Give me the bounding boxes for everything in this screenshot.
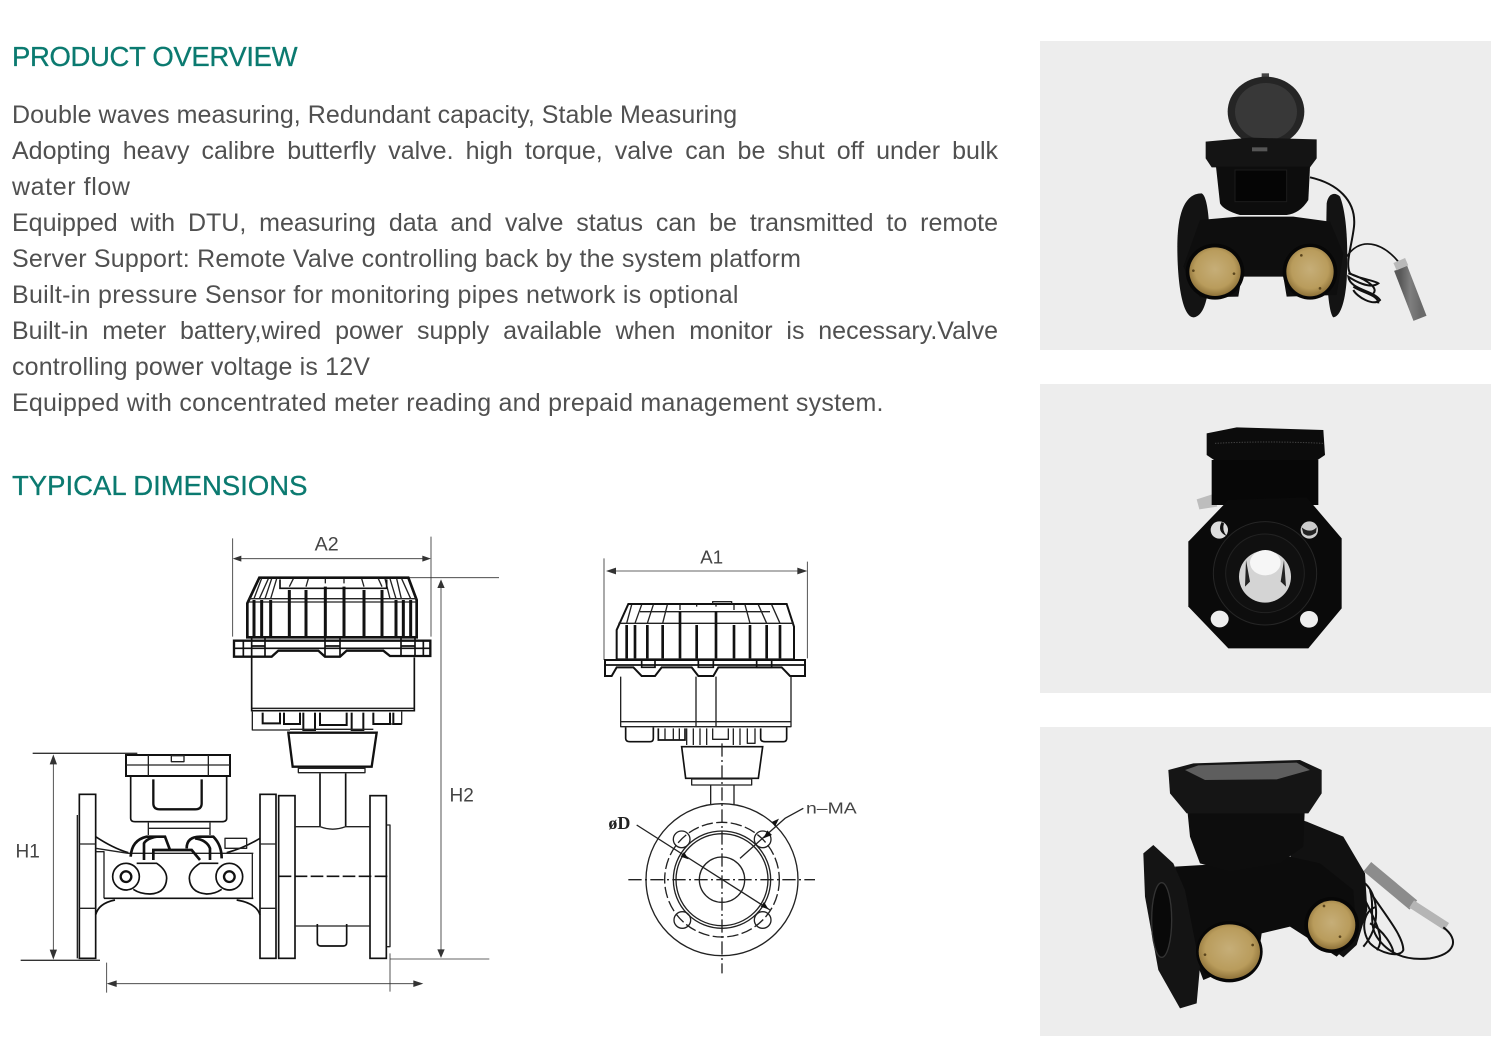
dimension H2: H2: [450, 786, 474, 807]
drawing: meter head, side view: [234, 578, 430, 826]
text block: product overview feature list: Equipped with DTU, measuring data and valve status can be transmitted to remote: [12, 209, 998, 237]
panel: product photo, end view: [1040, 384, 1491, 693]
dimension A2: [233, 534, 431, 637]
meter lid: [1228, 73, 1304, 147]
dimension H1: H1: [16, 841, 40, 862]
text block: product overview feature list: water flow: [12, 173, 131, 201]
dimension drawing: end view: [604, 546, 858, 974]
brass cap, rear: [1304, 897, 1359, 953]
panel: product photo, three-quarter view: [1040, 727, 1491, 1036]
dimension overall length: [107, 953, 423, 993]
front flange: [1143, 845, 1200, 1008]
panel: product photo, open lid view: [1040, 41, 1491, 350]
meter housing: [1212, 460, 1318, 505]
bore rings and opening: [1213, 522, 1317, 625]
callout: n-MA bolt holes: n–MA: [806, 800, 858, 817]
brass cap, left: [1186, 244, 1244, 300]
brass cap, right: [1283, 244, 1337, 300]
text block: product overview feature list: [12, 101, 998, 417]
meter housing: [1187, 803, 1305, 872]
rear flange: [1290, 818, 1367, 957]
drawing: meter body, right flanged section: [279, 796, 391, 958]
heading: typical dimensions: TYPICAL DIMENSIONS: [12, 470, 307, 501]
text block: product overview feature list: Equipped with concentrated meter reading and prepaid management system.: [12, 389, 884, 417]
dimension A1: [604, 546, 807, 660]
callout: n-MA bolt holes: [740, 800, 858, 858]
brass cap, front: [1196, 921, 1263, 982]
meter pipe body: [1183, 217, 1343, 297]
text block: product overview feature list: Adopting heavy calibre butterfly valve. high torque, valve can be shut off under bulk: [12, 137, 998, 165]
sensor cable and probe: [1363, 867, 1453, 959]
heading: product overview: PRODUCT OVERVIEW: [12, 41, 297, 72]
dimension drawing: side views: [16, 534, 499, 993]
drawing: ultrasonic meter, front view: [77, 755, 276, 958]
dimension H2: [390, 578, 499, 959]
meter head: [1207, 427, 1325, 461]
meter head: [1168, 760, 1322, 813]
drawing: meter head, end view: [605, 602, 805, 805]
cable gland: [1197, 494, 1217, 509]
bolt holes: [1211, 521, 1318, 628]
callout: diameter D: [608, 813, 770, 910]
text block: product overview feature list: controlling power voltage is 12V: [12, 353, 370, 381]
meter housing: [1216, 147, 1310, 215]
pipe body: [1175, 857, 1357, 980]
flange plate: [1188, 497, 1342, 648]
text block: product overview feature list: Double waves measuring, Redundant capacity, Stable Measuring: [12, 101, 737, 129]
drawing: flange circle with bolt holes: [628, 743, 815, 973]
dimension A2: A2: [315, 534, 339, 556]
meter head: [1206, 138, 1317, 167]
dimension A1: A1: [700, 546, 723, 567]
text block: product overview feature list: Built-in pressure Sensor for monitoring pipes network is optional: [12, 281, 739, 309]
sensor cable and probe: [1310, 177, 1420, 318]
meter flanges: [1177, 193, 1347, 317]
dimension H1: [16, 753, 137, 960]
text block: product overview feature list: Built-in meter battery,wired power supply available when monitor is necessary.Valve: [12, 317, 998, 345]
callout: diameter D: øD: [608, 813, 630, 833]
text block: product overview feature list: Server Support: Remote Valve controlling back by the system platform: [12, 245, 801, 273]
